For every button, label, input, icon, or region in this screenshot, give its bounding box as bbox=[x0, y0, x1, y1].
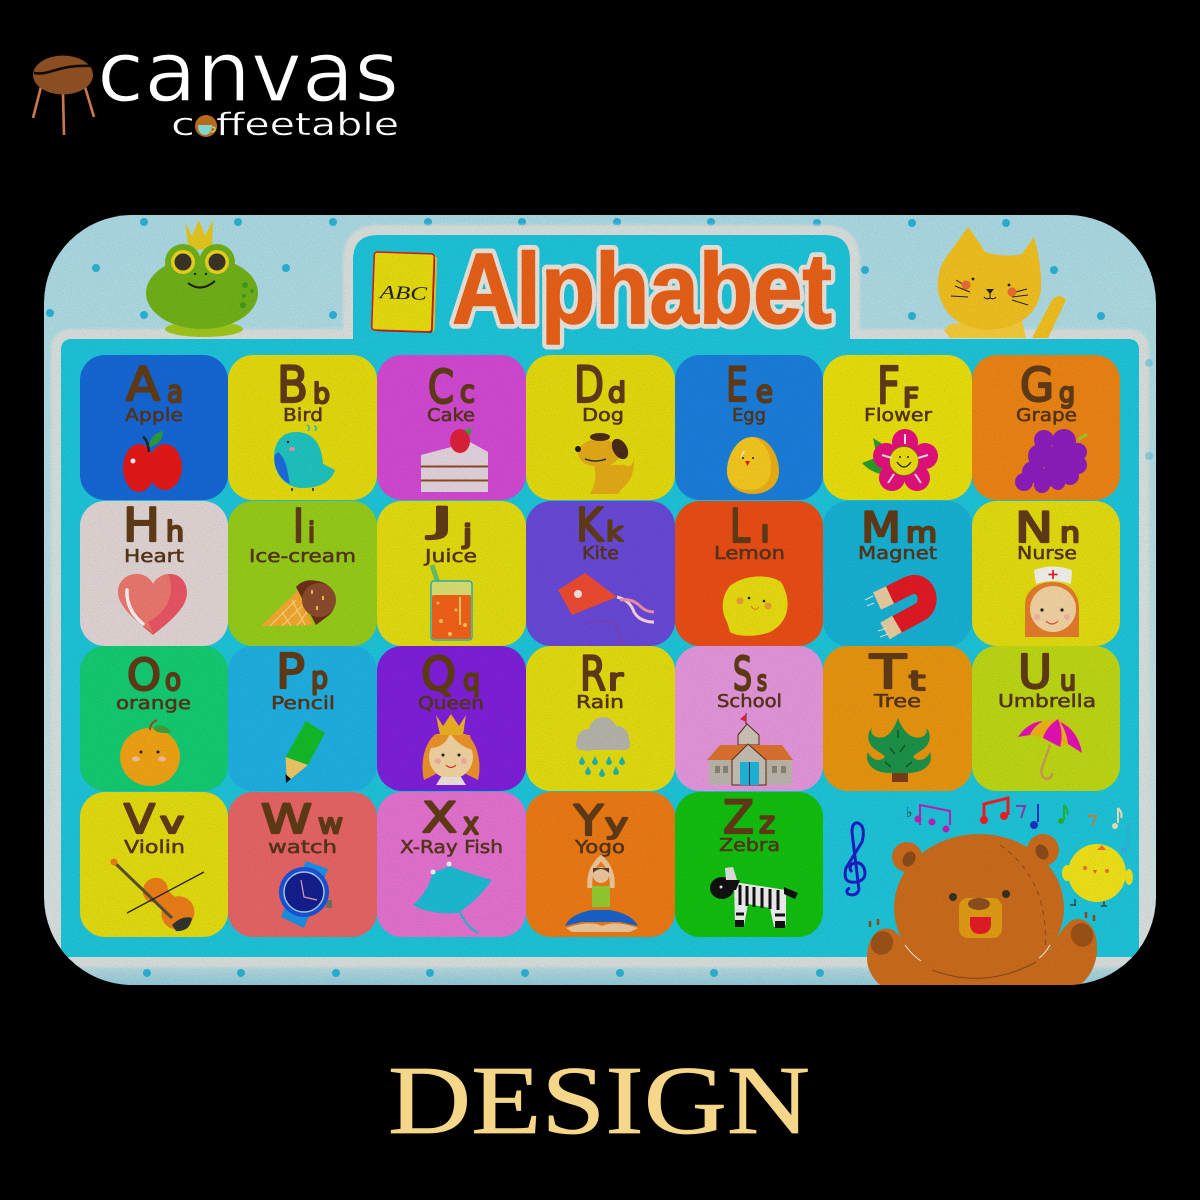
icon: x-ray fish bbox=[413, 862, 492, 933]
icon: cake bbox=[421, 428, 488, 492]
letters: Nn: N bbox=[1015, 503, 1053, 552]
card: K Kite bbox=[526, 498, 675, 646]
letters: Dd bbox=[576, 364, 625, 404]
icon: kite bbox=[558, 573, 654, 644]
letters: Yy: y bbox=[605, 807, 628, 840]
letters: Uu: u bbox=[1060, 664, 1076, 697]
letters: Bb: B bbox=[277, 356, 308, 414]
card: F Flower bbox=[823, 355, 972, 500]
icon: umbrella bbox=[1018, 719, 1082, 779]
letters: Gg: G bbox=[1020, 358, 1054, 412]
letters: Uu: U bbox=[1018, 645, 1052, 699]
letters: Ss: s bbox=[757, 664, 767, 697]
texture bbox=[44, 215, 1156, 985]
card: Q Queen bbox=[377, 646, 526, 791]
card: X X-Ray Fish bbox=[377, 792, 526, 937]
card: Y Yogo bbox=[526, 792, 675, 937]
letters: Jj: J bbox=[427, 501, 453, 541]
word: Heart: Heart bbox=[124, 546, 184, 567]
polka dots bbox=[46, 218, 1105, 320]
word: Cake: Cake bbox=[427, 405, 475, 426]
word: Yogo: Yogo bbox=[574, 837, 625, 858]
icon: yellow cat bbox=[938, 227, 1066, 338]
card: W watch bbox=[228, 792, 377, 937]
icon: apple bbox=[123, 431, 182, 492]
letters: Aa: a bbox=[167, 375, 183, 410]
letters: Xx bbox=[422, 793, 479, 842]
word: Violin: Violin bbox=[124, 837, 185, 858]
letters: Ww bbox=[261, 797, 343, 843]
letters: Hh bbox=[126, 506, 183, 542]
word: Egg: Egg bbox=[732, 405, 766, 426]
letters: Ii bbox=[293, 499, 315, 553]
letters: Vv bbox=[124, 797, 184, 843]
letters: Oo: o bbox=[165, 663, 181, 698]
word: Umbrella: Umbrella bbox=[998, 691, 1096, 712]
word: Dog: Dog bbox=[582, 405, 624, 426]
icon: ABC flash card bbox=[372, 252, 437, 333]
logo wordmark: canvas bbox=[97, 23, 399, 121]
icon: ABC flash card: ABC bbox=[377, 282, 428, 305]
letters: Gg bbox=[1021, 365, 1074, 410]
letters: Ff: F bbox=[877, 357, 900, 416]
letters: Aa: A bbox=[126, 357, 161, 411]
letters: Ff: F bbox=[903, 383, 919, 414]
letters: Ll: l bbox=[761, 523, 769, 548]
icon: watch bbox=[279, 861, 332, 928]
card: U Umbrella bbox=[972, 645, 1120, 791]
letters: Qq: q bbox=[463, 663, 480, 698]
letters: Qq: Q bbox=[421, 647, 456, 701]
icon: flower bbox=[862, 429, 938, 491]
letters: Tt: T bbox=[869, 645, 907, 699]
word: Zebra: Zebra bbox=[719, 835, 780, 856]
letters: Hh: h bbox=[166, 515, 184, 548]
letters: Pp: p bbox=[311, 661, 328, 696]
card: A Apple bbox=[80, 355, 228, 500]
letters: Xx: x bbox=[463, 807, 479, 842]
letters: Rr: R bbox=[580, 647, 606, 702]
word: Nurse: Nurse bbox=[1017, 543, 1077, 564]
icon: lemon bbox=[723, 576, 788, 636]
letters: Cc: c bbox=[460, 375, 475, 410]
letters: Ee: E bbox=[726, 358, 748, 413]
card: N Nurse bbox=[972, 501, 1120, 646]
title: Alphabet bbox=[452, 233, 832, 345]
icon: school bbox=[707, 713, 793, 785]
icon: bird bbox=[274, 425, 335, 491]
letters: Dd: D bbox=[574, 356, 604, 414]
card: S School bbox=[675, 646, 823, 791]
letters: Cc bbox=[429, 367, 474, 405]
letters: Yy: Y bbox=[573, 796, 603, 845]
card: C Cake bbox=[377, 355, 526, 500]
letters: Mm: M bbox=[861, 503, 901, 552]
icon: frog prince bbox=[146, 220, 258, 337]
card: V Violin bbox=[80, 792, 228, 937]
word: Queen: Queen bbox=[418, 693, 484, 714]
letters: Zz bbox=[723, 791, 775, 844]
icon: nurse bbox=[1025, 566, 1079, 637]
icon: treble clef bbox=[845, 823, 865, 895]
word: watch: watch bbox=[268, 837, 337, 858]
logo: canvas coffeetable: ffeetable bbox=[216, 107, 399, 143]
word: School: School bbox=[717, 691, 782, 712]
card: R Rain bbox=[526, 646, 675, 791]
letters: Dd: d bbox=[608, 376, 626, 409]
logo tagline: c bbox=[171, 107, 195, 143]
icon: zebra bbox=[710, 867, 798, 928]
icon: music notes bbox=[906, 798, 1128, 853]
letters: Kk: k bbox=[606, 517, 623, 548]
word: Magnet: Magnet bbox=[858, 543, 937, 564]
card: L Lemon bbox=[675, 499, 823, 646]
word: X-Ray Fish: X-Ray Fish bbox=[400, 837, 503, 858]
letters: Ll: L bbox=[730, 499, 750, 553]
icon: yellow chick bbox=[1062, 844, 1133, 906]
letters: Zz: Z bbox=[723, 791, 754, 844]
bottom and side dots bbox=[143, 359, 1153, 977]
letters: Zz: z bbox=[759, 806, 775, 841]
panel: teal board with title tab bbox=[61, 235, 1139, 957]
word: Rain: Rain bbox=[576, 692, 624, 713]
icon: yoga bbox=[565, 858, 638, 932]
letters: Yy bbox=[573, 796, 628, 845]
letters: Oo bbox=[127, 650, 181, 701]
letters: Mm bbox=[861, 503, 937, 552]
icon: coffee cup bbox=[195, 115, 217, 137]
card: E Egg bbox=[675, 355, 823, 500]
icon: ice-cream bbox=[261, 580, 336, 626]
letters: Vv: v bbox=[160, 806, 184, 841]
letters: Ll bbox=[730, 499, 769, 553]
icon: rain bbox=[576, 717, 630, 777]
panel: alphabet mat bbox=[44, 215, 1156, 985]
card: G Grape bbox=[972, 355, 1120, 500]
word: Ice-cream: Ice-cream bbox=[249, 546, 356, 567]
letters: Vv: V bbox=[124, 797, 156, 843]
letters: Aa bbox=[125, 365, 182, 404]
icon: magnet bbox=[865, 584, 927, 637]
card: P Pencil bbox=[228, 644, 377, 791]
icon: dog bbox=[575, 433, 634, 494]
letters: Bb bbox=[280, 364, 330, 405]
card: T Tree bbox=[823, 645, 972, 791]
icon: bear bbox=[867, 834, 1097, 985]
card: O Orange bbox=[80, 646, 228, 791]
icon: heart bbox=[118, 574, 187, 635]
letters: Tt: t bbox=[909, 666, 925, 697]
letters: Pp bbox=[276, 644, 328, 700]
letters: Ss: S bbox=[733, 647, 752, 701]
letters: Oo: O bbox=[127, 650, 161, 701]
logo: canvas coffeetable bbox=[33, 23, 399, 143]
letters: Pp: P bbox=[276, 644, 305, 700]
icon: grape bbox=[1015, 429, 1087, 493]
letters: Jj bbox=[427, 501, 472, 550]
word: Bird: Bird bbox=[283, 405, 323, 426]
letters: Kk bbox=[576, 498, 623, 552]
word: Juice: Juice bbox=[424, 546, 477, 567]
letters: Gg: g bbox=[1059, 376, 1075, 409]
letters: Cc: C bbox=[428, 360, 454, 414]
card: H Heart bbox=[80, 498, 228, 646]
icon: tree bbox=[867, 718, 931, 782]
card: B Bird bbox=[228, 355, 377, 500]
letters: Ff bbox=[880, 364, 918, 408]
letters: Ee: e bbox=[756, 375, 773, 410]
card: I Ice-cream bbox=[228, 499, 377, 646]
card: Z Zebra bbox=[675, 791, 823, 937]
letters: Nn: n bbox=[1060, 516, 1080, 549]
word: Grape: Grape bbox=[1016, 405, 1077, 426]
letters: Rr: r bbox=[608, 663, 624, 698]
letters: Bb: b bbox=[313, 377, 330, 410]
letters: Ww: w bbox=[318, 807, 343, 840]
card: M Magnet bbox=[823, 501, 972, 646]
word: Lemon: Lemon bbox=[714, 543, 785, 564]
word: Pencil: Pencil bbox=[271, 693, 335, 714]
letters: Ii: i bbox=[308, 516, 315, 549]
icon: music notes: ♭ bbox=[906, 805, 913, 821]
letters: Xx: X bbox=[422, 793, 457, 842]
letters: Uu bbox=[1018, 645, 1076, 699]
letters: Qq bbox=[421, 647, 480, 701]
word: orange: orange bbox=[116, 693, 191, 714]
icon: orange bbox=[120, 720, 180, 786]
letters: Nn bbox=[1015, 503, 1080, 552]
word: Flower: Flower bbox=[864, 405, 933, 426]
letters: Ee bbox=[728, 365, 773, 404]
icon: queen bbox=[422, 714, 480, 785]
word: Tree: Tree bbox=[873, 691, 921, 712]
card: D Dog bbox=[526, 355, 675, 500]
letters: Ii: I bbox=[293, 499, 304, 553]
letters: Tt bbox=[869, 645, 925, 699]
icon: juice bbox=[431, 565, 472, 640]
card: J Juice bbox=[377, 501, 526, 646]
icon: coffee bean table bbox=[33, 56, 94, 135]
word: Apple: Apple bbox=[125, 405, 183, 426]
letters: Jj: j bbox=[462, 520, 472, 550]
letters: Hh: H bbox=[123, 498, 160, 552]
word: Kite: Kite bbox=[582, 543, 619, 564]
icon: violin bbox=[110, 858, 204, 936]
letters: Mm: m bbox=[906, 516, 937, 549]
letters: Kk: K bbox=[576, 498, 605, 552]
icon: egg bbox=[727, 437, 779, 494]
icon: pencil bbox=[286, 721, 325, 783]
caption: DESIGN: DESIGN bbox=[388, 1047, 810, 1155]
letters: Ww: W bbox=[261, 797, 312, 843]
title: Alphabet bbox=[452, 233, 832, 345]
